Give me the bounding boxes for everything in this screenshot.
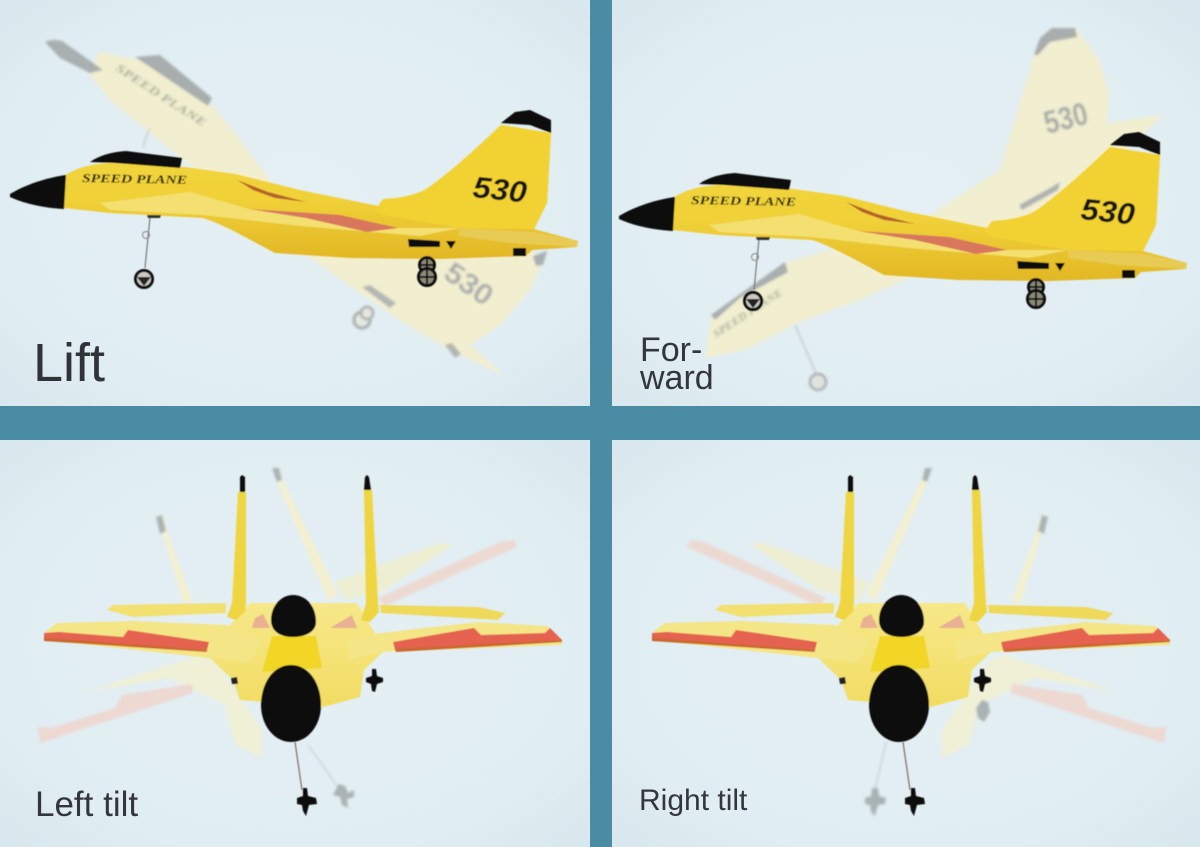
label: left tilt: Left tilt bbox=[35, 785, 138, 824]
ghost plane: nose lowered: 530 bbox=[1040, 95, 1091, 141]
ghost plane: nose raised: 530 bbox=[438, 257, 499, 313]
plane: level: 530 bbox=[471, 171, 529, 210]
plane: level: SPEED PLANE bbox=[691, 193, 796, 209]
ghost plane: nose lowered: SPEED PLANE bbox=[711, 287, 785, 341]
label: lift: Lift bbox=[33, 333, 105, 393]
plane: front view bbox=[652, 475, 1170, 816]
label: forward second line: ward bbox=[639, 359, 714, 397]
ghost plane: tilted left bbox=[38, 468, 517, 808]
label: forward: For- bbox=[640, 331, 702, 369]
label: right tilt: Right tilt bbox=[639, 784, 748, 817]
plane: level bbox=[10, 110, 578, 288]
ghost plane: nose lowered bbox=[705, 28, 1163, 390]
panel: lift bbox=[0, 0, 590, 406]
plane: level: SPEED PLANE bbox=[82, 171, 187, 187]
plane: front view bbox=[44, 475, 562, 816]
plane: level bbox=[619, 132, 1187, 310]
ghost plane: nose raised bbox=[45, 40, 547, 376]
panel: forward bbox=[612, 0, 1200, 406]
panel: left tilt bbox=[0, 440, 590, 847]
plane: level: 530 bbox=[1079, 193, 1137, 232]
ghost plane: nose raised: SPEED PLANE bbox=[113, 61, 209, 130]
ghost plane: tilted right bbox=[687, 468, 1166, 816]
panel: right tilt bbox=[612, 440, 1200, 847]
